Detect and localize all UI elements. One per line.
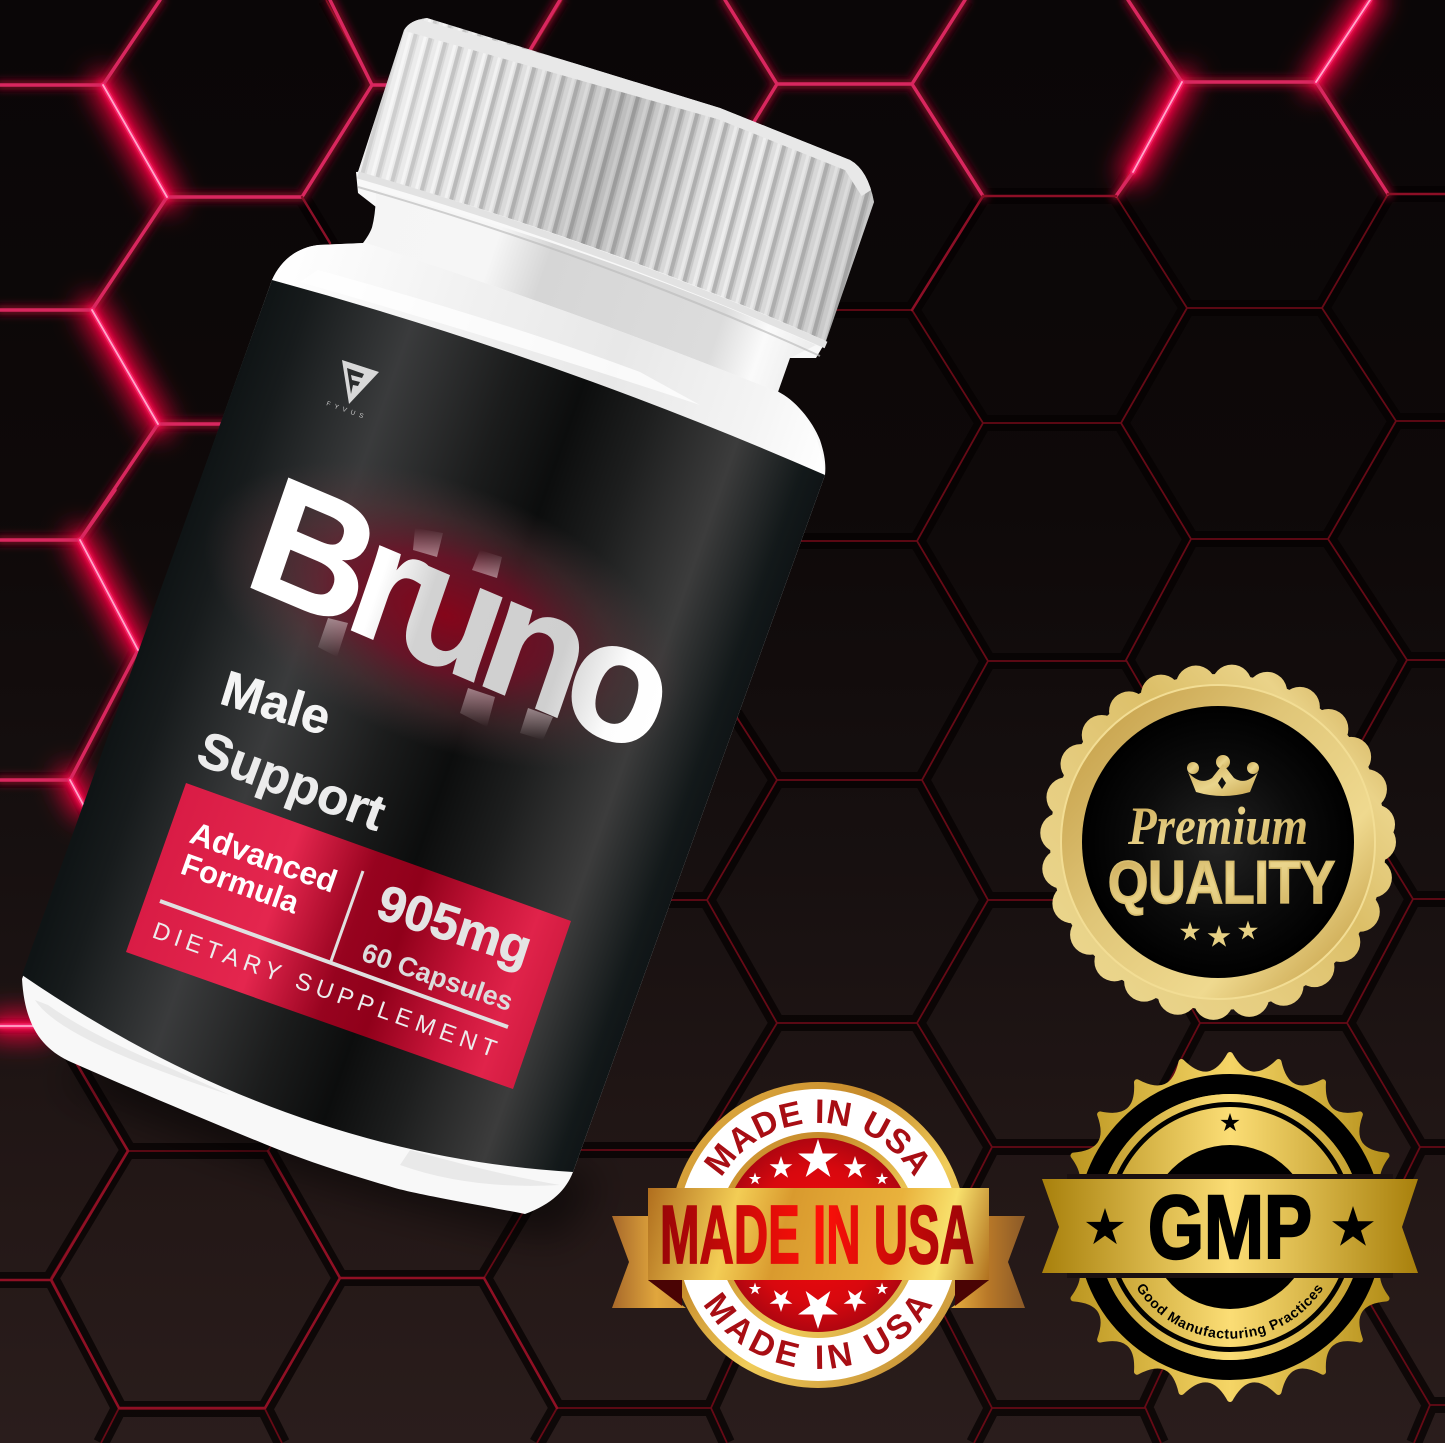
ribbon text: MADE IN USA [660,1188,974,1281]
formula text: Advanced [186,815,342,900]
stars [1086,1113,1374,1246]
bottle base highlight [35,1000,560,1186]
bottle drop shadow [60,1040,600,1240]
bottle neck shading [366,190,816,392]
black centre [1082,706,1354,978]
brand logo [325,360,379,422]
premium script text: Premium [1127,796,1308,856]
red glow on label [160,399,730,831]
ribbon band [1042,1179,1418,1273]
curved bottom text: MADE IN USA [704,1292,933,1369]
serrated gold edge [1060,1055,1400,1399]
brand name reflections [318,528,553,740]
inner gold ring [717,1132,919,1338]
black outer ring [1087,1084,1373,1370]
panel background [126,783,571,1089]
gold rim circle [669,1082,967,1388]
ribbed cap surface [358,18,874,341]
badge: premium quality [1050,674,1386,1010]
gold band [1097,1094,1363,1360]
white ring [677,1089,959,1381]
logo mark [342,360,379,404]
formula text second line: Formula [177,847,304,921]
shoulder highlight [300,270,700,405]
stars on red [749,1139,888,1329]
red centre [723,1138,913,1332]
divider lines [160,871,508,1027]
ribbon folds [648,1280,989,1306]
scalloped gold edge [1050,674,1386,1010]
quality text: QUALITY [1108,849,1335,916]
logo wordmark: FYVUS [325,400,368,422]
badge: made in usa [612,1082,1025,1388]
curved top text: MADE IN USA [704,1100,928,1177]
ribbon gaps [1067,1174,1393,1278]
gmp letters: GMP [1148,1178,1312,1278]
ribbon band [648,1188,989,1280]
bottle body [22,150,826,1214]
cap shading [358,18,874,341]
red info panel [126,783,571,1089]
badge: gmp [1042,1052,1418,1402]
screw cap [358,18,874,356]
bottle shoulder [272,243,825,475]
product bottle [22,18,874,1214]
cap lower rim [358,175,826,345]
black thin ring [1108,1104,1352,1350]
dietary supplement caption: DIETARY SUPPLEMENT [149,917,505,1065]
capsule count: 60 Capsules [358,937,517,1017]
black label [22,280,825,1172]
curved caption: Good Manufacturing Practices [1138,1284,1322,1339]
ribbon tails [612,1216,1025,1308]
black centre [1148,1145,1312,1309]
three stars [1180,920,1258,947]
dosage: 905mg [371,874,539,976]
product name: Male [215,660,337,746]
product name second line: Support [190,720,393,842]
cap top rim [408,24,868,192]
crown icon [1187,755,1259,796]
gold ring [1061,685,1375,999]
brand name: Bruno [229,441,693,788]
